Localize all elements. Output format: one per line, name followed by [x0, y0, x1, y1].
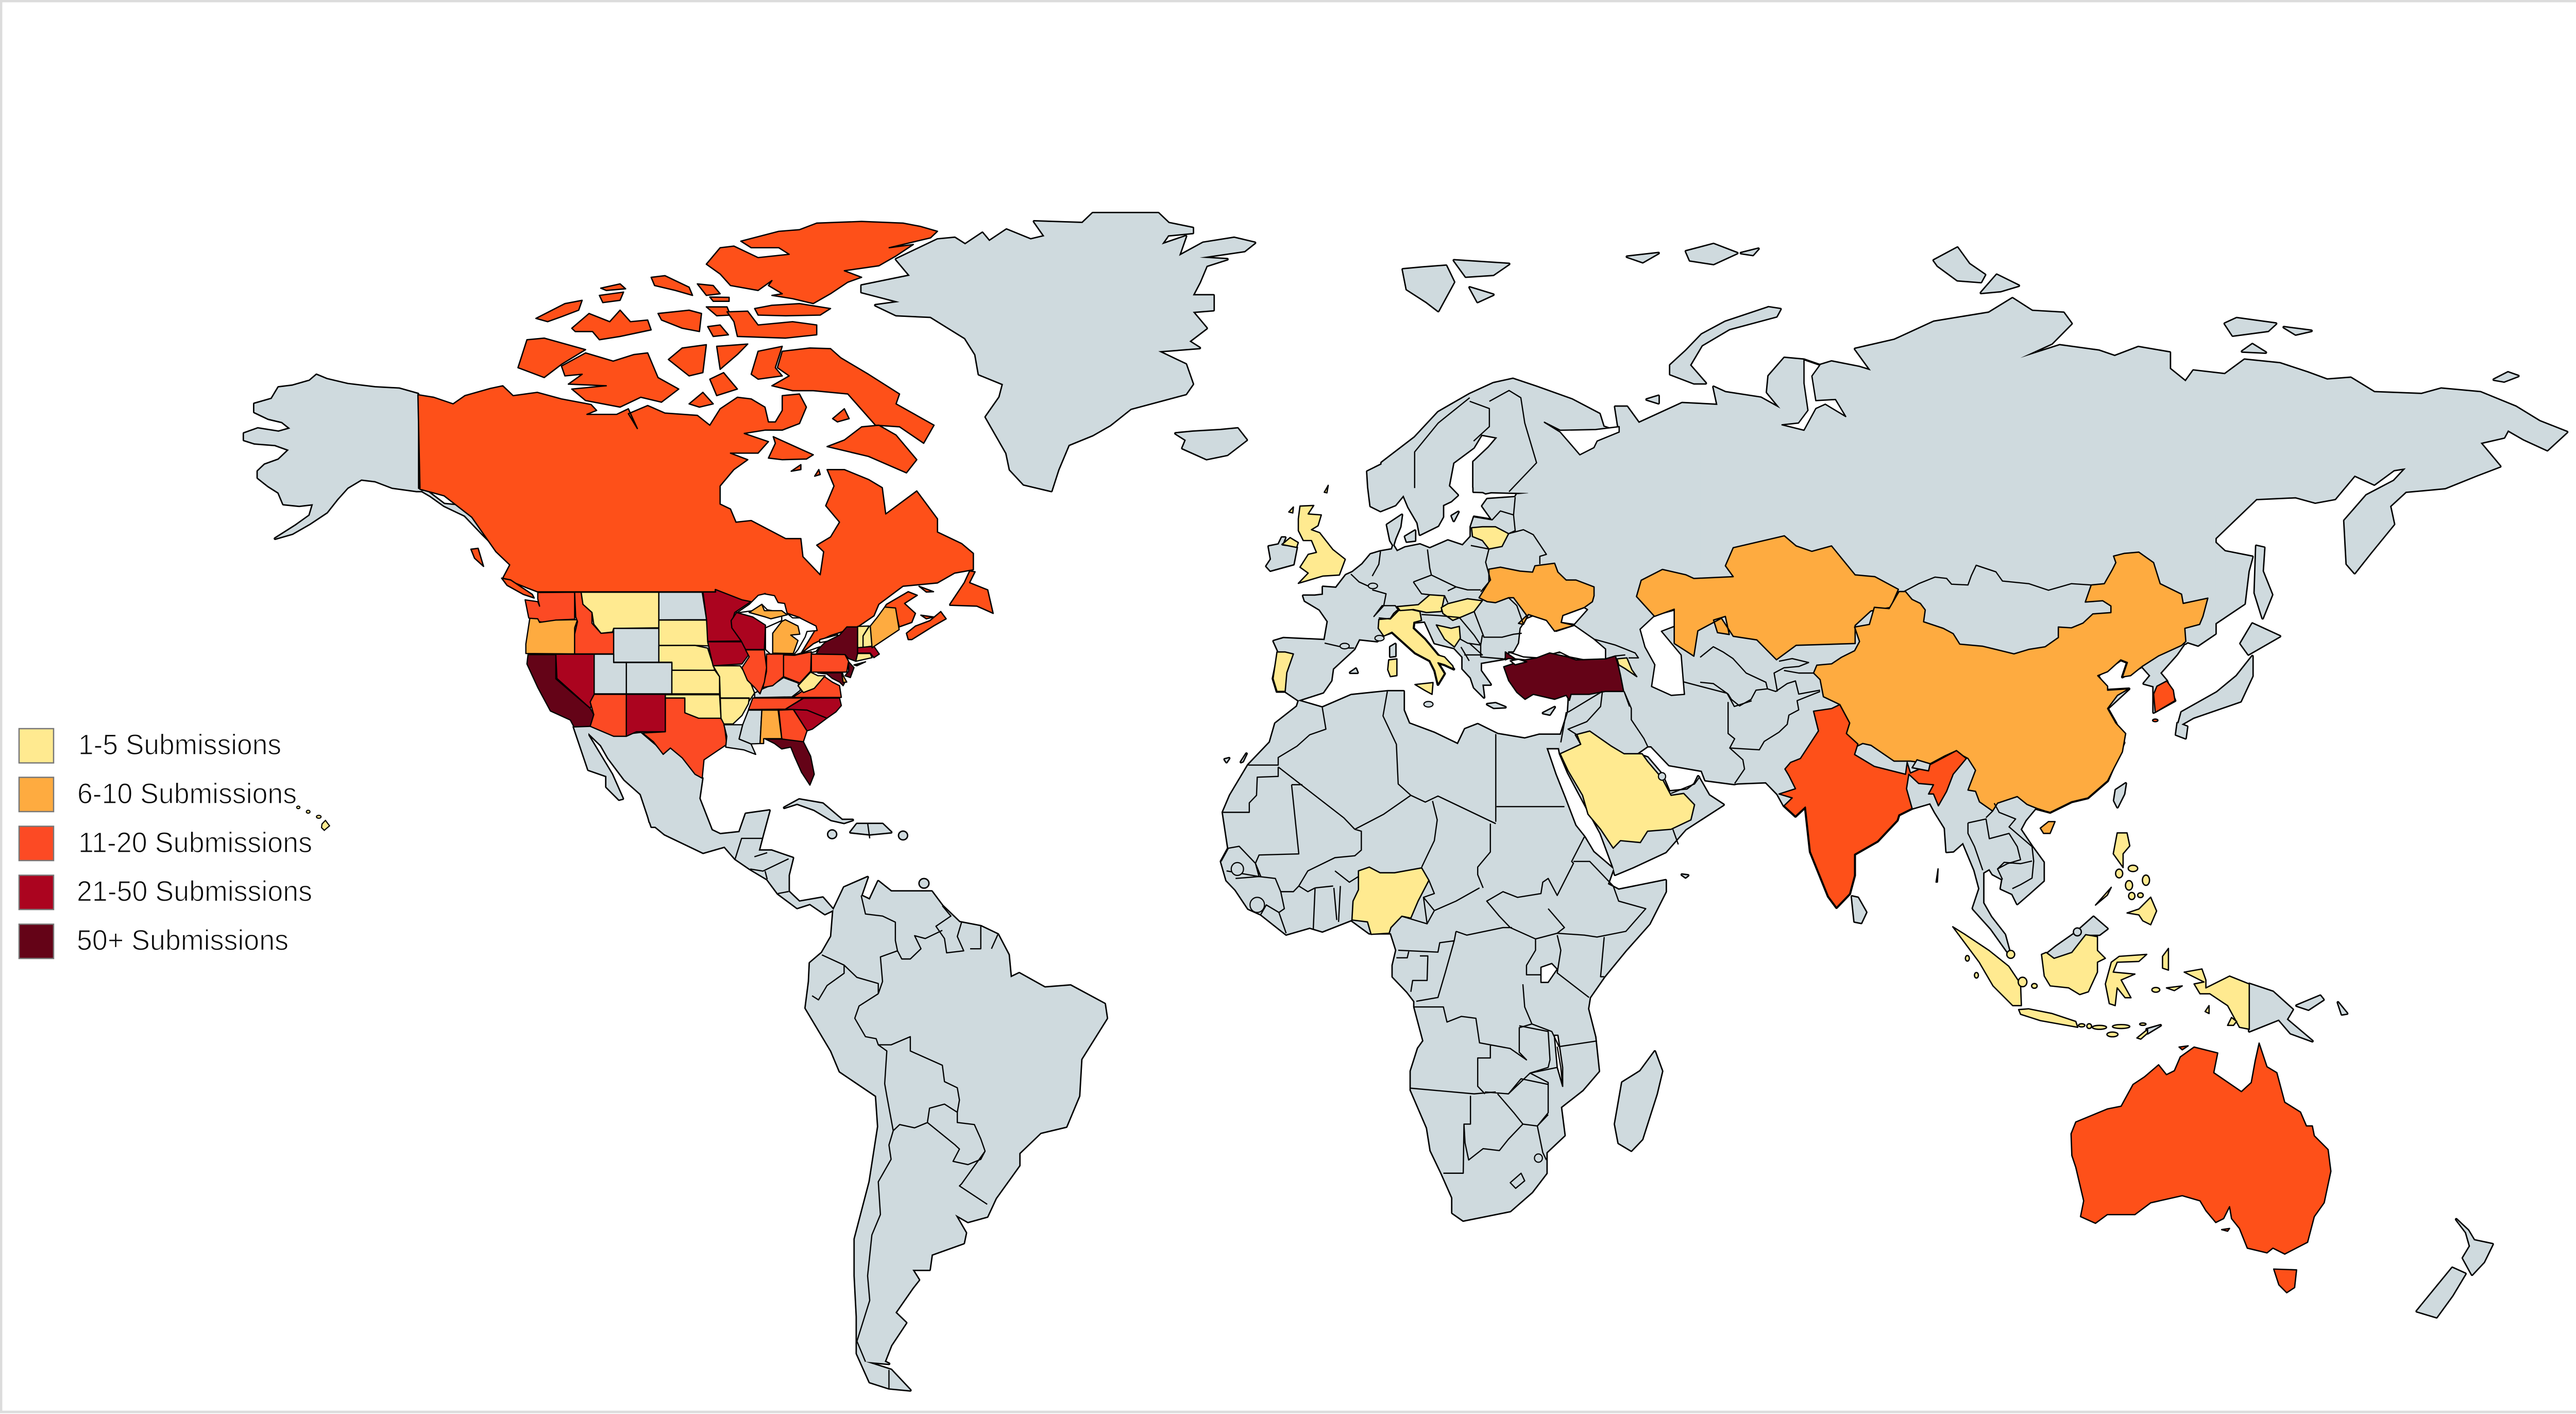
- Sea of Marmara: [1510, 659, 1527, 665]
- Arkansas: [720, 698, 749, 724]
- legend item: 1-5 Submissions: 1-5 Submissions: [78, 728, 281, 761]
- landmass: Mexico north: [574, 727, 709, 827]
- legend: [19, 728, 312, 958]
- Delaware: [842, 673, 847, 682]
- borders: Central and South America: [735, 823, 998, 1388]
- landmass: northern Russia, Scandinavia north, arctic islands, Japan: [1382, 244, 2567, 738]
- Nevada: [556, 654, 594, 708]
- United Kingdom: [1282, 485, 1345, 583]
- Arizona: [590, 694, 626, 736]
- Hungary: [1441, 599, 1482, 620]
- Philippines: [2095, 833, 2157, 925]
- Italy: [1378, 610, 1454, 695]
- Idaho: [574, 592, 614, 654]
- Armenia: [1617, 658, 1637, 677]
- China: [1814, 552, 2208, 813]
- Bhutan: [1912, 760, 1930, 771]
- South Korea: [2154, 681, 2175, 713]
- borders: Central and South Asia, Mongolia, Southeast Asia: [1700, 565, 2091, 888]
- Tennessee: [749, 698, 803, 710]
- Saudi Arabia and Nigeria: [1352, 731, 1694, 934]
- South Carolina: [793, 708, 827, 731]
- landmass: Malay peninsula, Borneo north, Papua New Guinea, New Zealand: [1969, 848, 2493, 1317]
- landmass: continental Europe: [1273, 436, 1700, 700]
- Canada Pacific and Atlantic provinces: [471, 548, 993, 639]
- Ohio: [784, 652, 811, 683]
- landmass: Central America, Caribbean and South America: [624, 773, 1107, 1390]
- Asia: highlighted countries: [1352, 536, 2208, 934]
- inland seas and white sea: [1509, 360, 1845, 1086]
- Montana: [581, 592, 659, 633]
- Indiana: [763, 654, 784, 687]
- Black Sea, Azov and Caspian: [1509, 608, 1684, 695]
- Connecticut and Rhode Island: [856, 653, 872, 661]
- Massachusetts: [858, 646, 879, 658]
- land fill pass hiding overlap strokes: [244, 213, 2567, 1390]
- Oklahoma: [665, 695, 721, 718]
- Missouri: [713, 666, 755, 701]
- Southeast Asia and Oceania highlighted countries: [1953, 833, 2331, 1293]
- Hainan: [2040, 821, 2055, 833]
- borders: Africa and Middle East: [1221, 682, 1752, 1188]
- West Virginia: [798, 672, 825, 693]
- Washington: [525, 592, 574, 623]
- Jeju: [2153, 719, 2158, 722]
- Canada mainland and arctic islands: [418, 222, 973, 653]
- Minnesota: [703, 590, 751, 642]
- Virginia: [792, 676, 841, 697]
- Texas: [642, 698, 727, 778]
- legend item: 21-50 Submissions: 21-50 Submissions: [77, 875, 312, 907]
- South Dakota: [659, 620, 709, 646]
- Australia: [2071, 1043, 2331, 1254]
- Nebraska: [659, 645, 715, 670]
- landmass: Sweden and Norway south: [1266, 436, 1700, 715]
- Wisconsin: [731, 613, 766, 649]
- Ukraine: [1479, 563, 1594, 631]
- New Hampshire: [863, 626, 874, 647]
- Turkey: [1504, 652, 1623, 700]
- borders: Scandinavia and Mongolia: [1415, 391, 1536, 492]
- Lake Victoria and Lake Malawi: [1541, 964, 1563, 1086]
- Mississippi: [739, 710, 762, 744]
- Portugal: [1273, 652, 1293, 692]
- Vermont: [858, 626, 869, 648]
- New Mexico: [626, 694, 665, 736]
- landmass: Africa, Middle East and Madagascar: [1221, 607, 1752, 1220]
- Kansas: [672, 670, 720, 694]
- Hawaii islands: [297, 806, 330, 830]
- borders: Europe: [1325, 497, 1638, 707]
- legend item: 50+ Submissions: 50+ Submissions: [77, 923, 289, 956]
- legend item: 1-5 Submissions: [19, 728, 281, 763]
- Maine: [870, 607, 899, 648]
- White Sea and Gulf of Ob: [1545, 360, 1845, 455]
- India: [1779, 704, 1967, 907]
- land base layer: [244, 213, 2567, 1390]
- Andaman Islands: [1936, 869, 1938, 882]
- United States by state: [525, 590, 899, 785]
- country borders: [735, 391, 2091, 1388]
- North Dakota: [659, 592, 706, 620]
- Indonesia: [1953, 927, 2249, 1039]
- legend item: 11-20 Submissions: 11-20 Submissions: [78, 826, 312, 858]
- Kazakhstan: [1636, 536, 1899, 660]
- Maryland: [818, 672, 845, 686]
- landmass: Alaska, Greenland and Iceland: [244, 213, 1255, 542]
- Illinois: [742, 650, 767, 694]
- California: [527, 654, 594, 727]
- legend item: 6-10 Submissions: 6-10 Submissions: [77, 777, 297, 810]
- landmass: southern and eastern Asia: [1733, 515, 2215, 928]
- Oregon: [526, 618, 578, 654]
- Georgia: [779, 710, 807, 742]
- Malaysia Brunei: [2073, 928, 2081, 936]
- Kangaroo Island and Melville Island: [2179, 1046, 2230, 1231]
- Europe: highlighted countries: [1273, 485, 1637, 700]
- Michigan: [749, 604, 800, 653]
- Tasmania: [2274, 1269, 2297, 1293]
- Kentucky: [755, 678, 801, 698]
- Lithuania: [1471, 527, 1509, 549]
- North Carolina: [785, 698, 841, 718]
- Pennsylvania: [811, 654, 849, 672]
- Long Island: [854, 662, 866, 666]
- New Jersey: [845, 662, 854, 678]
- Utah: [594, 654, 626, 694]
- New York: [816, 627, 858, 661]
- Florida: [766, 739, 814, 785]
- Bosnia: [1436, 625, 1460, 647]
- Louisiana: [724, 725, 756, 754]
- Canada: [418, 222, 993, 653]
- Great Lakes: [737, 594, 838, 656]
- Austria: [1397, 595, 1445, 613]
- Iowa: [708, 642, 749, 666]
- Wyoming: [614, 628, 659, 662]
- Colorado: [626, 663, 672, 694]
- Alabama: [760, 710, 782, 744]
